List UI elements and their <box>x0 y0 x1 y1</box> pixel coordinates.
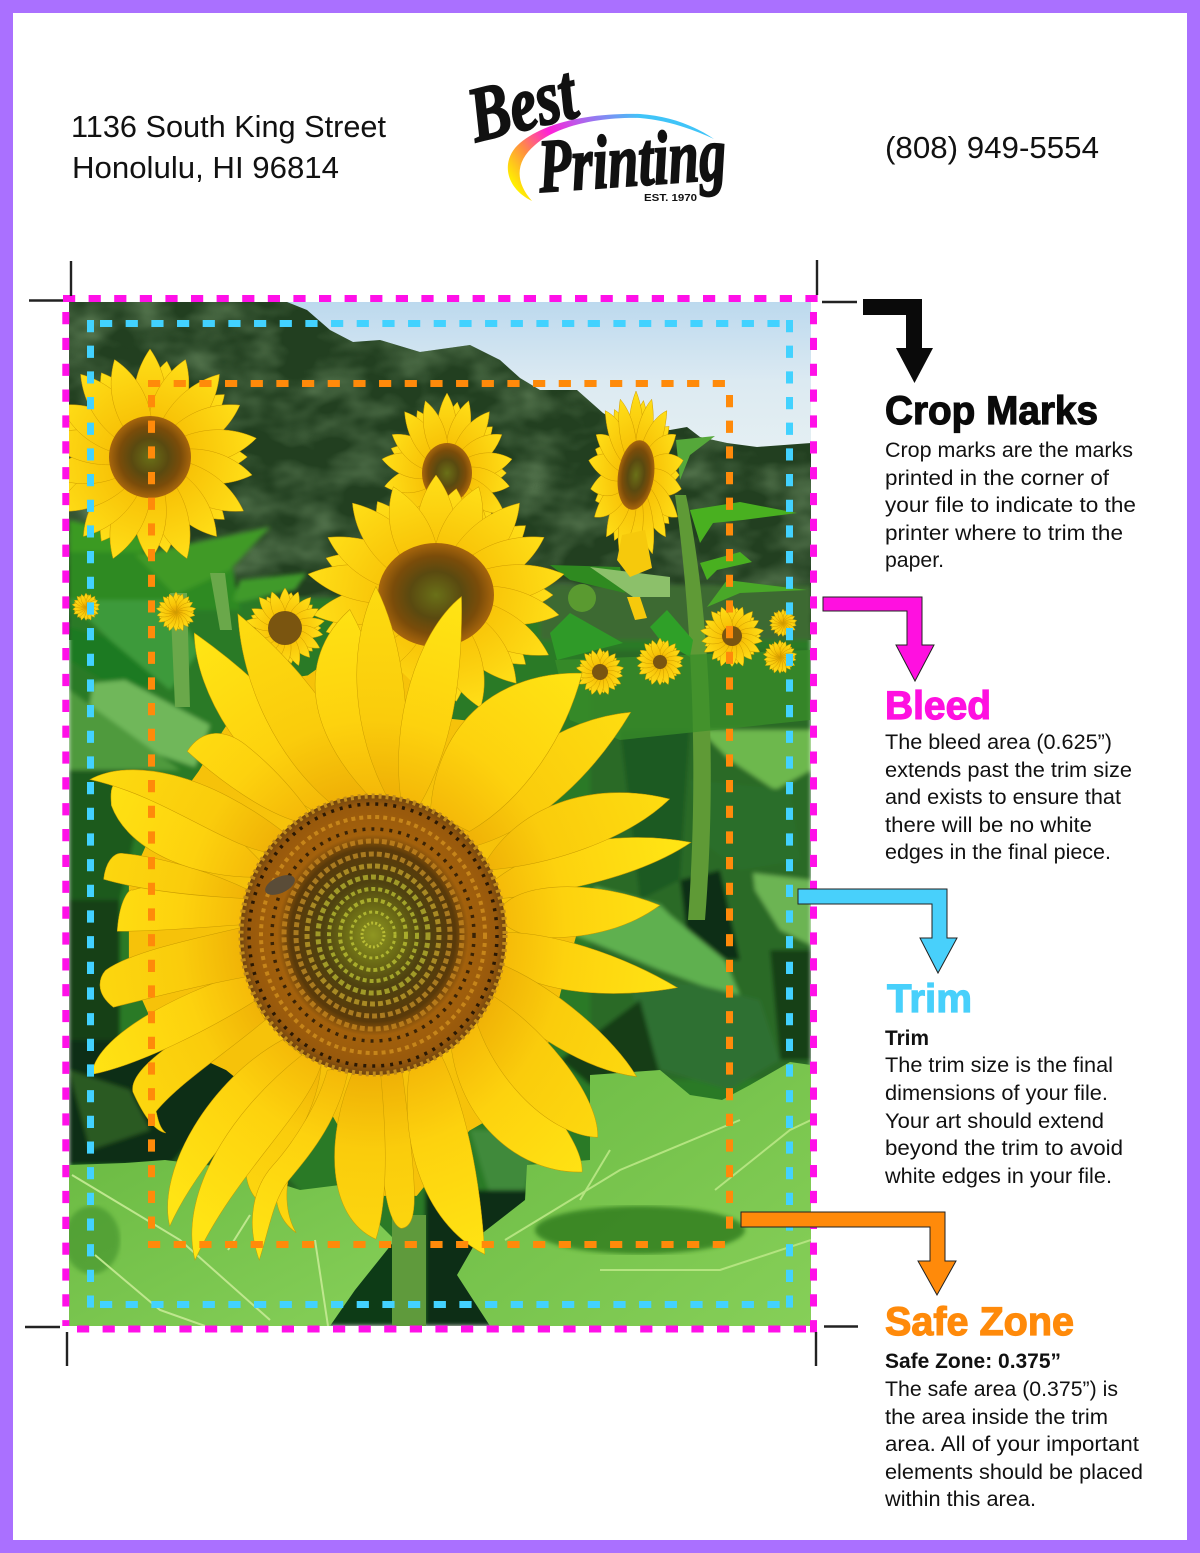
description: bleed <box>885 731 1132 864</box>
description: trim: Your art should extend <box>885 1110 1104 1133</box>
trim dashed line <box>90 320 790 1309</box>
heading: Bleed: Bleed <box>885 684 991 728</box>
description: trim: dimensions of your file. <box>885 1082 1108 1105</box>
description: safe zone: within this area. <box>884 1488 1036 1511</box>
sky <box>287 302 811 447</box>
safe zone text <box>884 1300 1143 1511</box>
big flower stem <box>392 1215 426 1326</box>
description: trim: Trim <box>885 1027 929 1050</box>
hanging buds <box>617 530 652 620</box>
green foliage background <box>69 520 811 1326</box>
description: crop marks: Crop marks are the marks <box>885 439 1133 462</box>
flower top right <box>587 391 685 558</box>
logo swoosh <box>508 114 714 201</box>
address: Honolulu, HI 96814 <box>72 150 339 185</box>
description: crop marks: paper. <box>885 549 944 572</box>
description: crop marks <box>885 439 1136 572</box>
arrow: bleed <box>823 597 934 681</box>
petal underlay <box>129 645 592 1196</box>
sunflower photo <box>41 302 811 1326</box>
phone number: (808) 949-5554 <box>885 130 1099 165</box>
safe zone dashed line <box>148 384 734 1244</box>
large sunflower <box>90 587 691 1260</box>
description: crop marks: printer where to trim the <box>885 522 1123 545</box>
description: safe zone: The safe area (0.375”) is <box>885 1378 1118 1401</box>
address: 1136 South King Street <box>71 109 386 144</box>
logo: Best Printing: Best <box>458 48 587 159</box>
address <box>71 109 386 185</box>
mountains <box>69 302 811 642</box>
seed disk <box>240 795 506 1075</box>
tall stem <box>675 495 711 920</box>
description: bleed: there will be no white <box>885 814 1092 837</box>
heading: Crop Marks: Crop Marks <box>885 389 1098 433</box>
bleed text <box>885 684 1132 864</box>
description: safe zone: Safe Zone: 0.375” <box>885 1350 1061 1373</box>
small flowers <box>245 588 325 668</box>
small leaves and stems on the left <box>170 573 232 707</box>
arrow: crop marks <box>863 299 933 383</box>
description: crop marks: your file to indicate to the <box>885 494 1136 517</box>
description: trim: The trim size is the final <box>885 1054 1113 1077</box>
description: safe zone: elements should be placed <box>885 1461 1143 1484</box>
lower left leaf <box>64 1160 395 1326</box>
description: bleed: and exists to ensure that <box>885 786 1121 809</box>
description: trim: beyond the trim to avoid <box>885 1137 1123 1160</box>
heading: Safe Zone: Safe Zone <box>885 1300 1074 1344</box>
arrow: safe zone <box>741 1212 956 1295</box>
bee <box>265 875 295 895</box>
crop marks text <box>885 389 1136 572</box>
stem leaves on the right <box>550 436 810 740</box>
lower right leaf <box>457 1062 811 1326</box>
flower middle top <box>382 393 512 520</box>
logo: Best Printing: EST. 1970 <box>644 192 697 204</box>
flower behind <box>305 475 567 714</box>
arrow: trim <box>798 889 957 973</box>
heading: Trim: Trim <box>887 977 972 1021</box>
description: safe zone <box>884 1350 1143 1511</box>
description: safe zone: the area inside the trim <box>885 1406 1108 1429</box>
description: safe zone: area. All of your important <box>885 1433 1139 1456</box>
description: bleed: extends past the trim size <box>885 759 1132 782</box>
petals <box>90 587 691 1260</box>
logo: Best Printing: Printing <box>535 112 729 209</box>
bleed dashed line <box>63 298 818 1333</box>
logo: Best Printing <box>458 48 729 209</box>
flower top left <box>69 349 256 559</box>
description: crop marks: printed in the corner of <box>885 467 1109 490</box>
crop marks <box>25 260 858 1366</box>
description: bleed: edges in the final piece. <box>885 841 1111 864</box>
background flowers <box>41 349 797 714</box>
description: bleed: The bleed area (0.625”) <box>885 731 1112 754</box>
trim text <box>884 977 1123 1188</box>
description: trim: white edges in your file. <box>884 1165 1112 1188</box>
description: trim <box>884 1027 1123 1188</box>
